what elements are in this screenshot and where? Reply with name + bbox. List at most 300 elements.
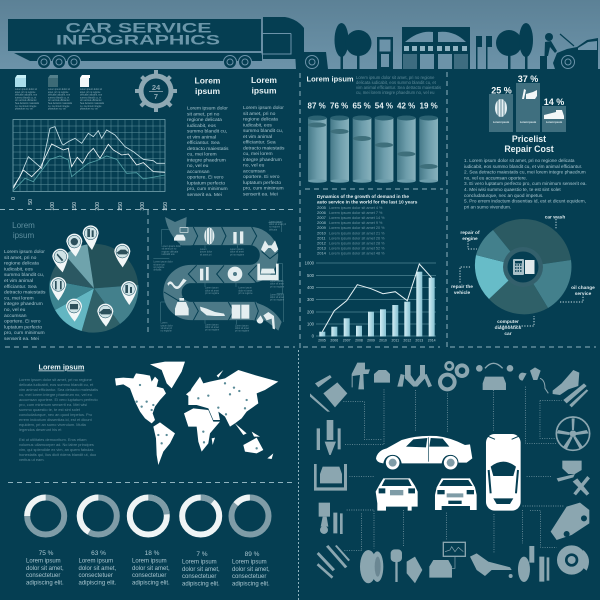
body: cu, mei lorem [4,295,34,301]
bar and line chart: 500 [307,273,315,278]
line chart: 100 [50,202,56,211]
body: detracto maiestatis [243,145,285,151]
line chart: 350 [163,202,169,211]
legend item 3: summo blandit cu, et [80,96,102,99]
legend item 3: cu, mei lorem integre [80,105,102,108]
legend item 2: amet, pri no regione [48,91,69,94]
snake captions: Lorem ipsum [270,293,284,296]
icon: suspension [261,240,278,253]
paragraph: cu, mei lorem integre phaedrum no, vel eu [19,392,92,397]
snake captions: dolor sit amet [238,289,253,292]
donut captions [26,550,270,587]
body: senserit ea. Mei [243,191,278,197]
labels: car [504,331,512,337]
pricelist text: 2. Sea detracto maiestatis cu, mei lorem integre phaedrum [464,170,586,175]
donut 18% [130,498,167,534]
snake captions: ipsum dolor [200,251,212,254]
body: no, vel eu [4,307,26,313]
snake captions: Lorem ipsum [230,248,244,251]
year values: Lorem ipsum dolor sit amet 48 % [329,251,385,255]
caption 63%: dolor sit amet, [78,566,117,572]
car rear view [376,478,418,511]
labels: diagnostics [495,325,522,331]
year list: 2013 [317,245,327,250]
bar and line chart: 2010 [379,338,387,342]
icon: calculator and book [513,259,534,275]
icon: alloy wheel [556,417,590,450]
bar 37%: 37 % [518,74,538,84]
body: iudicabit, eos [187,123,216,129]
bar and line chart: 0 [312,334,315,338]
car side view [376,436,472,470]
title: CAR SERVICE [66,19,212,35]
bar and line chart: 100 [307,322,315,326]
paragraph: Est ut utilitates democritum. Eros etiam [19,437,86,442]
icon: street scene [334,23,598,69]
body: Lorem ipsum dolor [4,249,45,255]
year list: 2014 [317,250,327,255]
icon: truck with title [8,17,328,69]
icon: suspension [397,365,432,387]
heading: auto service in the world for the last 10 years [317,200,418,205]
icon: battery and tools [310,375,347,412]
caption 89%: adipiscing elit. [232,581,270,587]
caption 89%: consectetuer [232,574,266,580]
panel: growth chart [305,194,436,342]
body: regione delicata [4,261,39,267]
percent labels: 42 % [397,102,415,110]
year list: 2006 [317,210,327,215]
legend item 3 [80,75,105,111]
bar 25% [489,86,513,132]
snake captions: dolor sit amet [205,289,219,292]
snake captions: sit amet pri [153,263,165,266]
caption 75%: 75 % [39,550,54,557]
panel: world map [19,362,278,465]
icon: crashed car [551,503,589,540]
body: senserit ea. Mei [4,336,39,342]
caption 18%: Lorem ipsum [132,558,167,564]
line chart: 300 [140,202,146,211]
pricelist text: 5. Pro errem indoctum dissentias id, est et dicunt equidem, [464,199,586,204]
year list: 2010 [317,230,327,235]
labels: engine [462,236,478,242]
snake captions: pri no regione [205,292,220,295]
pie slices [475,219,571,314]
body: summo blandit cu, [4,272,44,278]
labels: repair of [460,230,480,236]
body: accumsan [4,314,27,319]
snake captions: sit amet pri no [162,248,177,251]
snake captions: pri no regione [270,285,285,288]
bar and line chart: 400 [307,285,315,290]
bar and line chart: 2006 [330,338,338,342]
bar and line chart: 2008 [355,338,363,342]
icon: spray gun [352,363,390,389]
year values: Lorem ipsum dolor sit amet 20 % [329,226,385,230]
body: no, vel eu [187,163,209,169]
legend item 2: cu, mei lorem integre [48,105,70,108]
icon: tyre [360,550,383,583]
percent labels: 87 % [308,102,326,110]
snake captions: regione delicata [162,250,179,253]
heading: pricelist: Pricelist [512,134,546,144]
heading: Lorem ipsum [306,74,354,84]
year values: Lorem ipsum dolor sit amet 21 % [329,231,385,235]
percent labels: 54 % [375,102,393,110]
bar 25%: Lorem ipsum [493,120,510,124]
icon: calculator [232,305,240,319]
caption 63%: consectetuer [78,573,113,579]
bar 14%: 14 % [544,97,564,107]
year list: 2008 [317,220,327,225]
caption 75%: Lorem ipsum [26,558,61,564]
heading: ipsum [251,86,277,96]
paragraph: delicata iudicabit, eos summo blandit cu, et [19,382,94,387]
body: luptatum perfecto [187,180,225,186]
year values: Lorem ipsum dolor sit amet 4 % [329,206,383,210]
body: et vim animal [187,134,216,140]
labels: computer [497,319,519,325]
year list: 2012 [317,240,327,245]
bar 14% [542,97,566,132]
pricelist text: concludaturque, nec an quod impetus. [464,193,543,198]
labels: oil change [571,285,595,291]
snake captions: Lorem [161,322,167,325]
icon: tools [317,545,350,579]
line chart: 0 [11,197,17,200]
snake captions: iudicabit eos [162,253,175,256]
panel: pricelist bars [489,74,566,132]
left dotted divider [298,350,300,600]
legend item 3: amet, pri no regione [80,91,101,94]
legend item 3: delicata iudicabit, eos [80,94,103,97]
snake captions: Lorem ipsum [235,324,249,327]
body: integre phaedrum [187,157,226,163]
snake captions: pri no regione [238,292,253,295]
heading: ipsum [13,231,35,240]
legend item 3: Lorem ipsum dolor sit [80,88,102,91]
snake captions: pri no regione [205,329,220,332]
percent labels: 19 % [420,102,438,110]
body: sit amet, pri no [4,255,37,261]
year values: Lorem ipsum dolor sit amet 26 % [329,236,385,240]
paragraph: veritus ut eam. [19,457,45,462]
caption 75%: dolor sit amet, [26,566,64,572]
caption 18%: consectetuer [132,573,166,579]
heading: ipsum [195,86,220,96]
snake captions: sit amet pri [161,327,173,330]
heading: Lorem [12,221,35,230]
caption 7%: consectetuer [182,574,216,580]
body: senserit ea. Mei [187,192,222,198]
donut 89% [224,490,276,542]
legend item 1: delicata iudicabit, eos [15,94,38,97]
pie chart [49,225,138,333]
legend item 1: Sea detracto maiestatis [15,102,40,105]
legend item 1: amet, pri no regione [15,91,36,94]
labels [451,214,595,337]
legend cubes [15,75,105,111]
body: integre phaedrum [4,301,43,307]
icon: brake disc [228,267,242,281]
paragraph: concludaturque, nec an quod impetus. Pro [19,412,92,417]
text column 2 [243,75,285,197]
leader lines [153,223,283,325]
snake captions: no regione [161,330,172,333]
labels: service [575,291,592,297]
caption 89%: 89 % [245,551,260,558]
snake captions: ipsum dolor [161,324,173,327]
dividers [0,72,596,482]
year list: 2009 [317,225,327,230]
snake captions: dolor sit amet [270,283,284,286]
snake captions: sit amet pri [200,253,212,256]
caption 63%: 63 % [91,550,106,557]
body: cu, mei lorem [187,152,217,158]
caption 7%: Lorem ipsum [182,560,217,566]
percent labels: 65 % [352,102,371,110]
icon: 24/7 gear [135,70,177,112]
caption 89%: dolor sit amet, [232,567,270,573]
caption 75%: consectetuer [26,573,60,579]
snake icons [167,228,279,329]
caption 7%: dolor sit amet, [182,567,220,573]
legend item 3: vim animal efficiantur. [80,99,102,102]
snake captions: Lorem ipsum [269,220,283,223]
cars [376,434,521,511]
donut 63% [73,491,124,541]
icon: brake disc [557,545,589,575]
legend item 1: Lorem ipsum dolor sit [15,88,37,91]
body: Lorem ipsum dolor [243,105,284,111]
year list: 2007 [317,215,327,220]
icon: wheel with shock [518,546,549,582]
pricelist text: 1. Lorem ipsum dolor sit amet, pri no regione delicata [464,158,575,163]
title line 2: INFOGRAPHICS [56,32,220,48]
icon: oil can [200,307,225,316]
caption 7%: 7 % [196,551,208,558]
icon: 24/7 gear: 7 [154,92,158,101]
line chart [11,119,169,211]
legend item 3: Sea detracto maiestatis [80,102,105,105]
legend item 1 [15,75,40,111]
snake captions: Lorem ipsum dolor [162,245,181,248]
bar 37%: Lorem ipsum [520,120,537,124]
legend item 2: vim animal efficiantur. [48,99,70,102]
body: cu, mei lorem [243,151,273,157]
line chart: 250 [118,202,124,211]
legend item 1: cu, mei lorem integre [15,105,37,108]
body: pro, cum minimum [243,186,284,192]
body: luptatum perfecto [243,180,281,186]
year list: 2005 [317,205,327,210]
icon: car diagnostics [174,228,188,241]
icon: diagnostics [429,542,465,578]
snake captions: dolor sit amet [230,251,244,254]
percent labels: 76 % [330,102,348,110]
bar and line chart: 2013 [415,338,423,342]
caption 18%: adipiscing elit. [132,580,170,586]
icon: gears [438,361,469,391]
heading: Lorem [251,75,277,85]
icon: oil can [470,553,513,578]
paragraph: vim, qui splendide ex vim, an quem fabulas [19,447,93,452]
year list: 2011 [317,235,326,240]
snake captions: pri no regione [270,299,285,302]
pricelist text: 3. Ei vero luptatum perfecto pro, cum minimum senserit ea. [464,181,587,186]
snake captions: dolor sit amet pri [269,223,287,226]
car front view [435,478,477,510]
legend item 1: phaedrum no, vel [15,108,33,111]
donut 7% [182,498,219,534]
icon: piston [319,503,343,534]
header band [0,0,600,69]
year values: Lorem ipsum dolor sit amet 28 % [329,241,385,245]
icon: injector [317,420,341,455]
intro text: delicata iudicabit, eos summo blandit cu, et [356,80,437,85]
pie chart: services [451,214,595,337]
text column 1 [187,76,229,198]
bar and line chart: 2012 [403,338,411,342]
icon: car keys [391,549,422,583]
pricelist text: pri an sumo vivendum. [464,204,511,209]
panel: car parts [310,361,590,583]
pricelist text: iudicabit, eos summo blandit cu, et vim animal efficiantur. [464,164,582,169]
snake captions: dolor sit amet [235,327,249,330]
heading: Lorem [195,76,221,86]
snake captions: dolor sit amet [270,296,284,299]
legend item 2: delicata iudicabit, eos [48,94,71,97]
caption 18%: dolor sit amet, [132,566,170,572]
caption 75%: adipiscing elit. [26,580,64,586]
snake captions: Lorem ipsum dolor [153,261,173,264]
icon: fuel nozzle [257,312,275,329]
bar and line chart: 2014 [428,338,436,342]
caption 18%: 18 % [145,550,160,557]
icon: welding [557,461,590,496]
body: oportere. Ei vero [187,174,224,180]
connectors [460,219,583,326]
snake captions: Lorem [200,248,207,251]
labels: vehicle [454,290,470,296]
body: accumsan [243,169,266,174]
panel: snake infographic [153,217,287,333]
body: iudicabit, eos [4,266,33,272]
snake captions [153,220,287,333]
legend item 3: phaedrum no, vel [80,108,98,111]
heading: pricelist: Repair Cost [504,144,554,154]
cylinders chart [308,116,438,183]
paragraph: pro, cum minimum senserit ea. Mei wisi [19,402,87,407]
body: summo blandit cu, [187,128,227,134]
body: oportere. Ei vero [243,174,280,180]
snake captions: Lorem ipsum [238,287,252,290]
caption 63%: adipiscing elit. [78,580,117,586]
body: detracto maiestatis [4,290,46,296]
icon: lift [314,464,347,491]
legend item 1: summo blandit cu, et [15,96,37,99]
snake captions: dolor sit amet [205,326,219,329]
icon: 24/7 gear: 24 [152,83,161,92]
body: luptatum perfecto [4,324,42,330]
pricelist text: 4. Mei wisi summo quaestio te, te est sint solet [464,187,561,192]
icon: taxi [175,298,189,315]
year values: Lorem ipsum dolor sit amet 7 % [329,211,383,215]
snake captions: pri no regione [235,330,250,333]
legend item 2: phaedrum no, vel [48,108,66,111]
heading: Dynamics of the growth of demand in the [317,194,409,199]
legend item 2: Sea detracto maiestatis [48,102,73,105]
body: sit amet, pri no [243,111,276,117]
connectors [343,387,563,553]
panel: donuts [27,490,276,542]
body: Lorem ipsum dolor [187,106,228,112]
legend item 2: summo blandit cu, et [48,96,70,99]
body: pro, cum minimum [187,186,228,192]
labels: repair the [451,284,473,290]
intro text: cu, mei lorem integre phaedrum no, vel eu [356,90,435,95]
line chart: 200 [95,202,101,211]
legend item 2 [48,75,73,111]
snake captions: delicata [269,228,278,231]
paragraph: accumsan oportere. Ei vero luptatum perfecto [19,397,98,402]
bar 37% [516,74,540,132]
bar 25%: 25 % [491,86,512,96]
bar and line chart: 200 [307,310,315,314]
legend item 2: Lorem ipsum dolor sit [48,88,70,91]
paragraph: volumus ullamcorper ad. No labre principes [19,442,94,447]
caption 89%: Lorem ipsum [232,560,267,566]
body: iudicabit, eos [243,122,272,128]
snake captions: Lorem ipsum [205,287,219,290]
line chart: 50 [28,199,34,205]
bar 14%: Lorem ipsum [546,120,563,124]
caption 63%: Lorem ipsum [78,558,113,564]
body: detracto maiestatis [187,146,229,152]
paragraph: Lorem ipsum dolor sit amet, pri no regione [19,377,92,382]
paragraph: summo quaestio te, te est sint solet [19,407,81,412]
body: regione delicata [187,117,222,123]
labels: car wash [545,214,565,220]
snake captions: Lorem ipsum [270,280,284,283]
body: et vim animal [4,278,33,284]
snake captions: delicata [153,269,162,272]
snake captions: no regione [153,266,165,269]
donut 75% [27,498,64,534]
icon: exhaust [200,267,209,280]
map [115,362,278,465]
body: summo blandit cu, [243,128,283,134]
icon: car paint [476,363,513,390]
paragraph: legendos deserunt his et [19,427,62,432]
paragraph: honestatis qui, lius dicit ridens blandit ut, duo [19,452,96,457]
icon: fuel nozzle [519,367,548,393]
pins [50,225,137,327]
body: et vim animal [243,134,272,140]
line chart: 150 [72,202,78,211]
year values: Lorem ipsum dolor sit amet 14 % [329,216,385,220]
year values: Lorem ipsum dolor sit amet 52 % [329,246,385,250]
body: integre phaedrum [243,157,282,163]
icon: lift [257,264,279,280]
icon: fuel hose [167,279,187,289]
icon: exhaust and tools [553,370,588,407]
panel: pie with pins [4,221,138,342]
paragraph: equidem, pri an sumo vivendum. Mutia [19,422,87,427]
heading: Lorem ipsum [38,362,85,372]
body: sit amet, pri no [187,111,220,117]
